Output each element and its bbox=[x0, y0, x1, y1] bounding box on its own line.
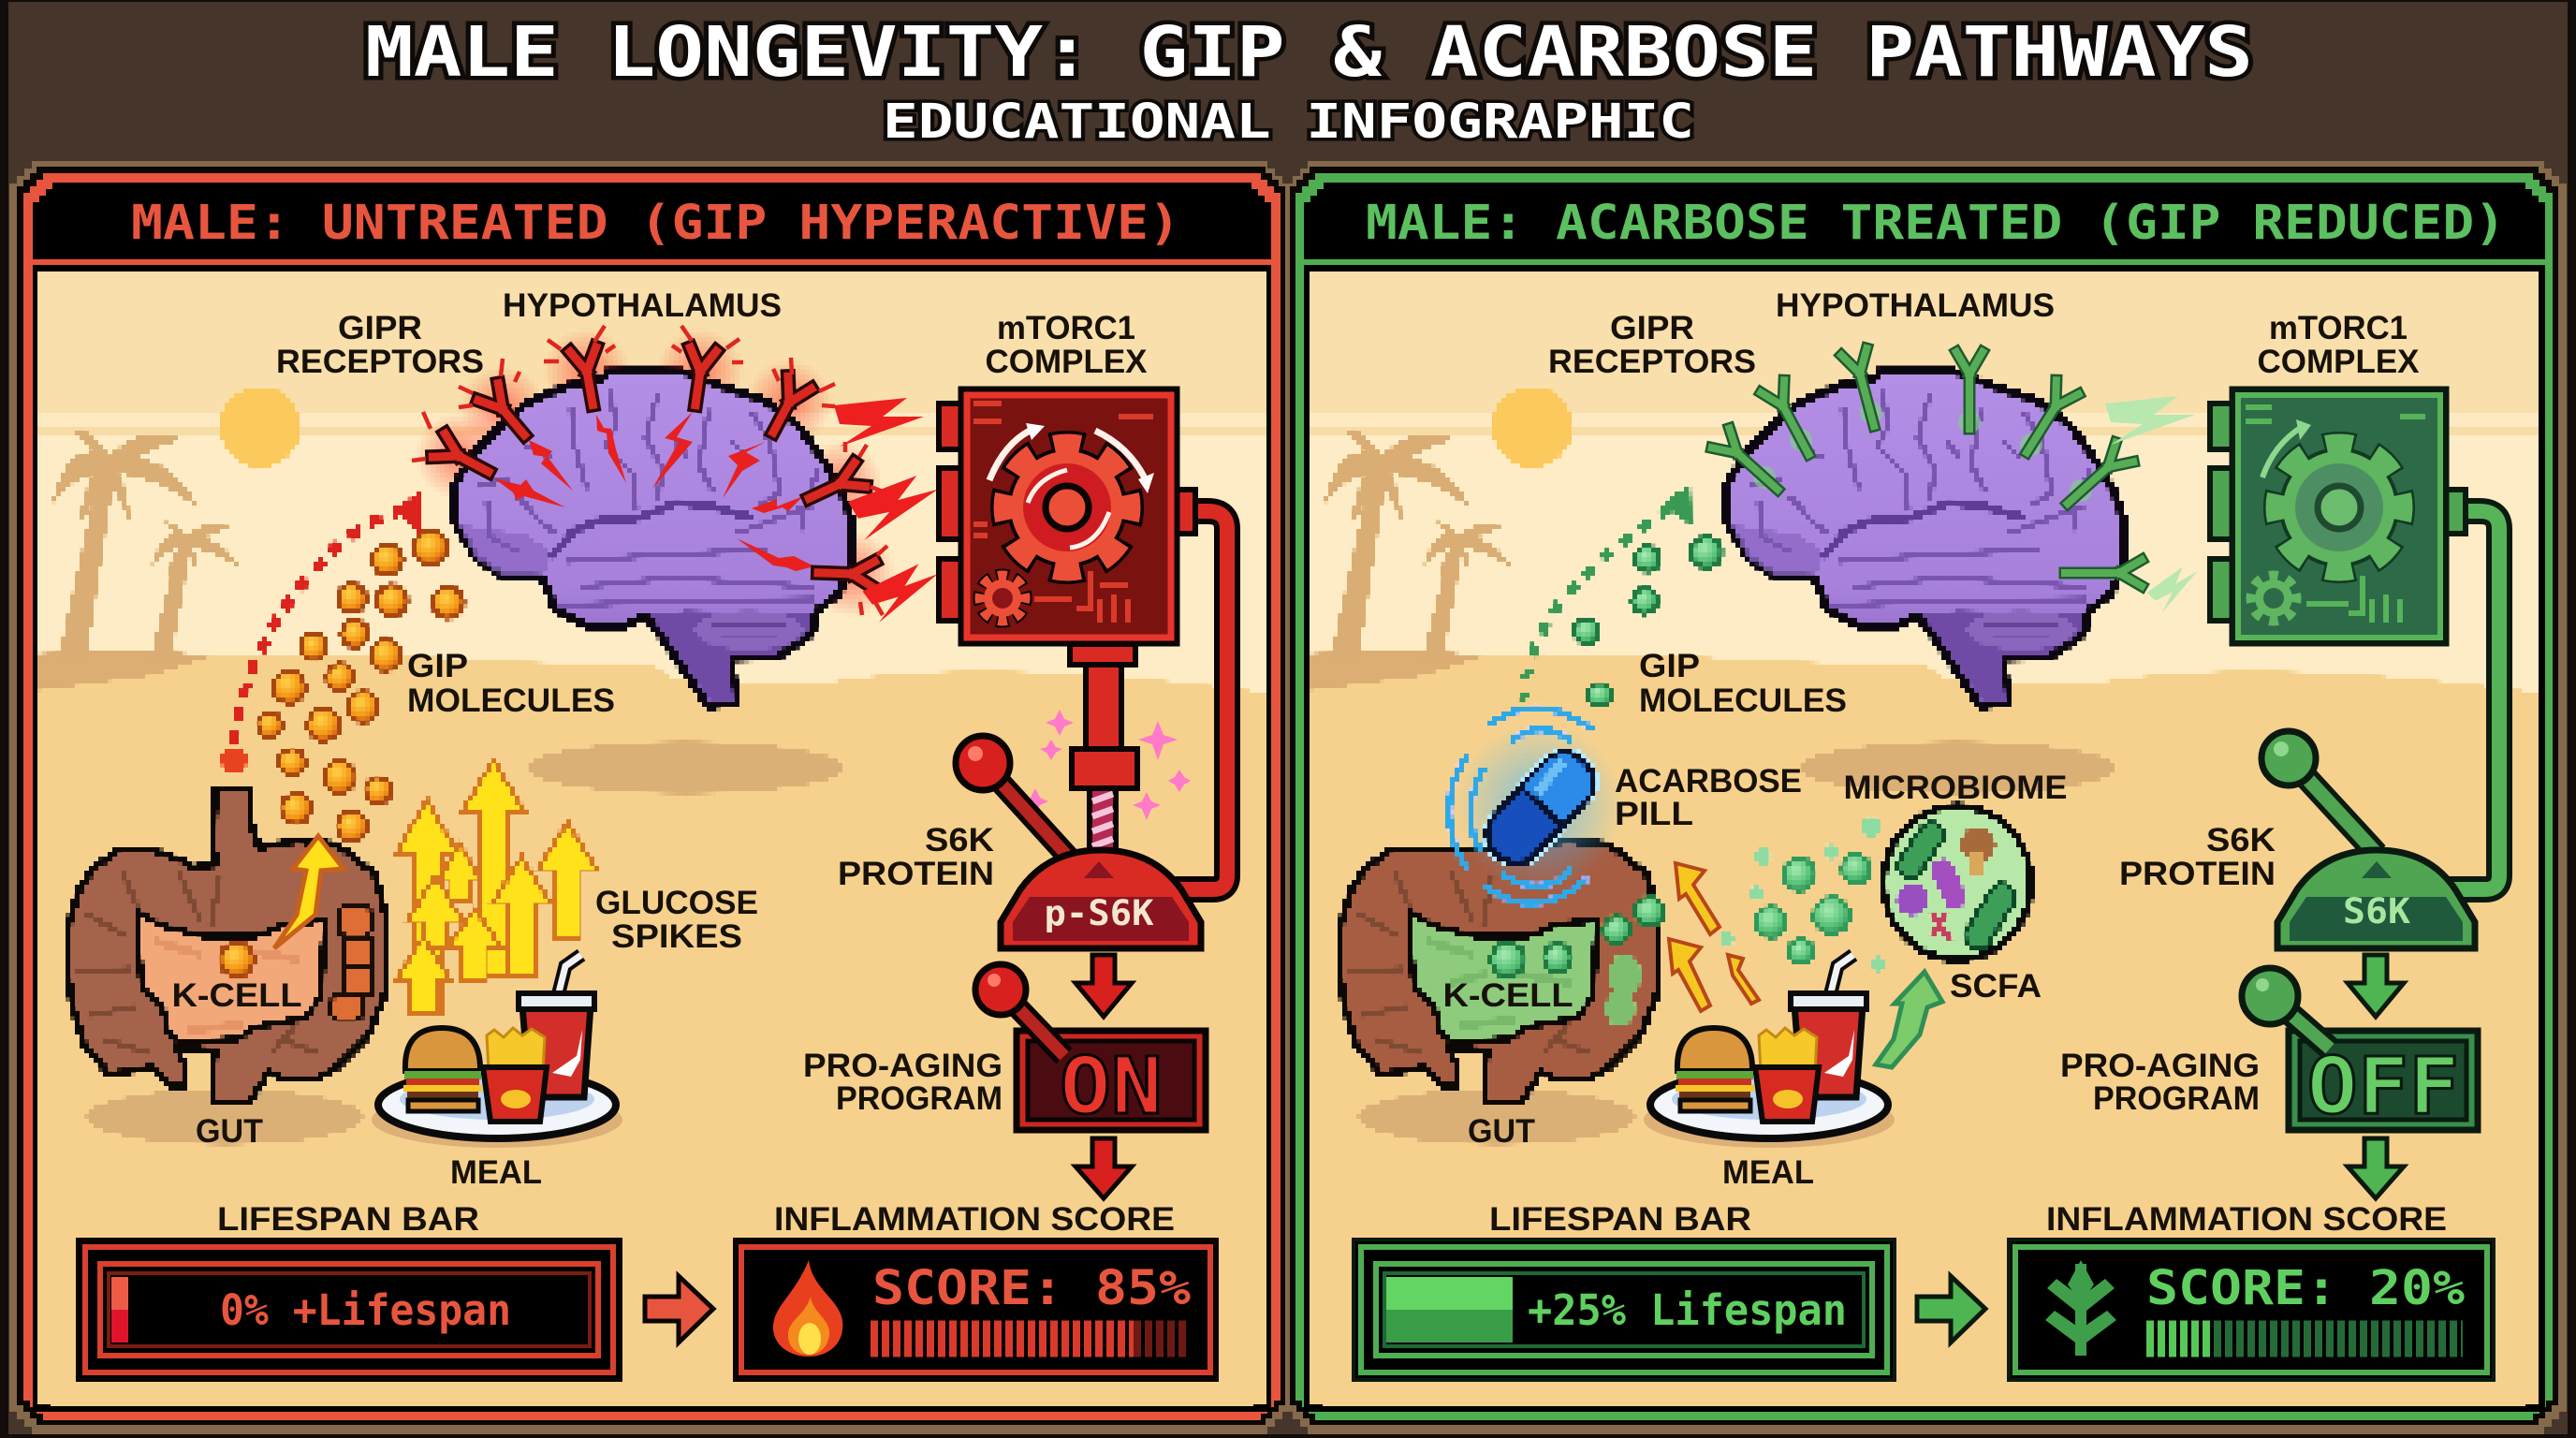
label: pro-aging program: PRO-AGING bbox=[803, 1048, 1003, 1084]
label: gipr receptors bbox=[276, 310, 484, 380]
icons: GIP molecules reduced bbox=[1574, 537, 1721, 706]
label: gut: GUT bbox=[196, 1113, 263, 1150]
label: s6k protein: S6K bbox=[2206, 822, 2276, 858]
arrow: lifespan to score bbox=[645, 1276, 713, 1343]
dome text: p-S6K: p-S6K bbox=[1045, 893, 1154, 933]
panel heading: untreated: MALE: UNTREATED (GIP HYPERACTIVE) bbox=[131, 196, 1180, 251]
label: pro-aging program: PROGRAM bbox=[2093, 1080, 2260, 1117]
icon: gut with green k-cell region bbox=[1339, 841, 1663, 1102]
label: gip molecules: GIP bbox=[1639, 648, 1700, 684]
label: gipr receptors: RECEPTORS bbox=[276, 344, 484, 380]
title: MALE LONGEVITY: GIP & ACARBOSE PATHWAYS bbox=[365, 12, 2253, 93]
ground shadows bbox=[86, 741, 844, 1145]
icons: small glucose arrows bbox=[1669, 863, 1759, 1011]
panel: male untreated bbox=[9, 161, 1290, 1434]
icon: sparkles bbox=[1022, 710, 1191, 820]
desert scene bbox=[37, 387, 1266, 1406]
lifespan bar: 0%: 0% +Lifespan bbox=[220, 1285, 511, 1335]
label: mtorc1 complex: COMPLEX bbox=[2258, 344, 2420, 380]
panel heading: treated: MALE: ACARBOSE TREATED (GIP REDUCED) bbox=[1366, 196, 2506, 251]
arrow: down to score bbox=[2348, 1138, 2404, 1198]
icon: flame bbox=[773, 1260, 842, 1357]
score text: 85%: SCORE: 85% bbox=[872, 1261, 1191, 1316]
receptor glow bbox=[416, 329, 895, 617]
label: gut: GUT bbox=[1468, 1113, 1535, 1150]
label: s6k protein: S6K bbox=[925, 822, 994, 858]
icons: external signal bolts bbox=[834, 398, 946, 624]
icon: brain bbox=[452, 372, 852, 707]
score text: 20%: SCORE: 20% bbox=[2146, 1261, 2465, 1316]
icon: microbiome bbox=[1883, 806, 2031, 960]
label: s6k protein: PROTEIN bbox=[2119, 856, 2276, 892]
arrow: down to score bbox=[1076, 1138, 1132, 1198]
label: mtorc1 complex: mTORC1 bbox=[997, 310, 1135, 346]
label: microbiome: MICROBIOME bbox=[1844, 770, 2067, 806]
icon: pro-aging lever bbox=[975, 964, 1064, 1056]
label: gip molecules: MOLECULES bbox=[407, 682, 615, 719]
label: gipr receptors: GIPR bbox=[338, 310, 422, 346]
arrow: down to program bbox=[1076, 955, 1132, 1017]
lifespan bar: +25%: +25% Lifespan bbox=[1528, 1285, 1847, 1335]
label: glucose spikes: GLUCOSE bbox=[595, 885, 758, 921]
arrow: lifespan to score bbox=[1917, 1276, 1985, 1343]
inflammation score box: 20% bbox=[2009, 1240, 2494, 1380]
label: pro-aging program bbox=[803, 1048, 1003, 1117]
label: acarbose pill: ACARBOSE bbox=[1615, 763, 1802, 800]
subtitle: EDUCATIONAL INFOGRAPHIC bbox=[883, 95, 1694, 150]
label: mtorc1 complex bbox=[985, 310, 1148, 380]
icon: S6K lever bbox=[2261, 731, 2377, 854]
icon: acarbose pill bbox=[1449, 708, 1623, 903]
arrow: scfa upward bbox=[1876, 972, 1942, 1067]
icons: SCFA molecules bbox=[1720, 816, 1885, 972]
score bars: 20% bbox=[2146, 1320, 2463, 1357]
lifespan bar: 0% bbox=[78, 1240, 621, 1380]
arrow: down to program bbox=[2348, 955, 2404, 1017]
icon: brain bbox=[1724, 372, 2124, 707]
label: pro-aging program: PRO-AGING bbox=[2060, 1048, 2260, 1084]
icon: S6K lever bbox=[956, 736, 1068, 857]
label: gipr receptors bbox=[1548, 310, 1756, 380]
label: meal: MEAL bbox=[1722, 1154, 1814, 1191]
icon: gut with k-cell region bbox=[67, 789, 387, 1102]
label: meal: MEAL bbox=[450, 1154, 542, 1191]
panel: acarbose treated bbox=[1285, 161, 2567, 1434]
icon: p-S6K dome bbox=[1001, 850, 1201, 948]
icon: meal bbox=[372, 955, 622, 1148]
label: hypothalamus: HYPOTHALAMUS bbox=[503, 287, 782, 324]
label: k-cell: K-CELL bbox=[172, 977, 301, 1014]
score bars: 85% bbox=[871, 1320, 1187, 1357]
label: gipr receptors: GIPR bbox=[1610, 310, 1694, 346]
label: acarbose pill bbox=[1615, 763, 1802, 832]
label: glucose spikes bbox=[595, 885, 758, 955]
label: inflammation score: INFLAMMATION SCORE bbox=[774, 1201, 1175, 1238]
icon: red mTORC1 complex bbox=[939, 389, 1227, 889]
label: mtorc1 complex: mTORC1 bbox=[2269, 310, 2408, 346]
label: mtorc1 complex: COMPLEX bbox=[985, 344, 1148, 380]
icon: gut glucose arrow bbox=[274, 836, 344, 948]
switch box: OFF bbox=[2289, 1031, 2478, 1132]
switch box: ON bbox=[1017, 1031, 1206, 1132]
dashed arrow: gut to brain bbox=[1522, 485, 1691, 704]
icon: meal bbox=[1644, 955, 1895, 1148]
label: gip molecules: GIP bbox=[407, 648, 468, 684]
label: inflammation score: INFLAMMATION SCORE bbox=[2046, 1201, 2447, 1238]
label: gip molecules bbox=[1639, 648, 1847, 719]
illustration layer: treated bbox=[1310, 372, 2539, 1406]
icons: green receptors and bases bbox=[1712, 348, 2142, 586]
icons: faint signal bolts bbox=[2105, 396, 2206, 614]
label: scfa: SCFA bbox=[1950, 968, 2042, 1005]
label: s6k protein bbox=[2119, 822, 2276, 892]
switch box: ON: ON bbox=[1060, 1040, 1163, 1132]
label: s6k protein: PROTEIN bbox=[838, 856, 994, 892]
inflammation score box: 85% bbox=[735, 1240, 1217, 1380]
label: glucose spikes: SPIKES bbox=[611, 918, 742, 955]
switch box: OFF: OFF bbox=[2306, 1040, 2460, 1132]
icons: GIP molecules bbox=[257, 532, 463, 842]
label: gip molecules: MOLECULES bbox=[1639, 682, 1847, 719]
label: pro-aging program: PROGRAM bbox=[836, 1080, 1003, 1117]
label: gipr receptors: RECEPTORS bbox=[1548, 344, 1756, 380]
icon: S6K dome bbox=[2277, 850, 2475, 948]
label: gip molecules bbox=[407, 648, 615, 719]
illustration layer: untreated bbox=[37, 329, 1266, 1406]
dashed arrow: gut to brain bbox=[221, 491, 423, 773]
desert scene bbox=[1310, 387, 2539, 1406]
label: s6k protein bbox=[838, 822, 994, 892]
lifespan bar: +25% bbox=[1354, 1240, 1895, 1380]
label: k-cell: K-CELL bbox=[1443, 977, 1573, 1014]
ground shadows bbox=[1358, 741, 2116, 1145]
label: mtorc1 complex bbox=[2258, 310, 2420, 380]
label: lifespan bar: LIFESPAN BAR bbox=[217, 1201, 479, 1238]
dome text: S6K: S6K bbox=[2343, 891, 2411, 932]
label: hypothalamus: HYPOTHALAMUS bbox=[1776, 287, 2055, 324]
label: lifespan bar: LIFESPAN BAR bbox=[1489, 1201, 1751, 1238]
icons: glucose spike arrows bbox=[395, 760, 597, 1013]
icons: receptors, bolts and sparks bbox=[412, 326, 889, 615]
treated panel content bbox=[1310, 287, 2539, 1406]
icon: pro-aging lever bbox=[2242, 968, 2330, 1049]
label: pro-aging program bbox=[2060, 1048, 2260, 1117]
icon: green mTORC1 complex bbox=[2210, 389, 2499, 889]
label: acarbose pill: PILL bbox=[1615, 796, 1693, 832]
icon: rod and collar bbox=[1072, 665, 1137, 856]
icon: plant bbox=[2045, 1260, 2116, 1356]
